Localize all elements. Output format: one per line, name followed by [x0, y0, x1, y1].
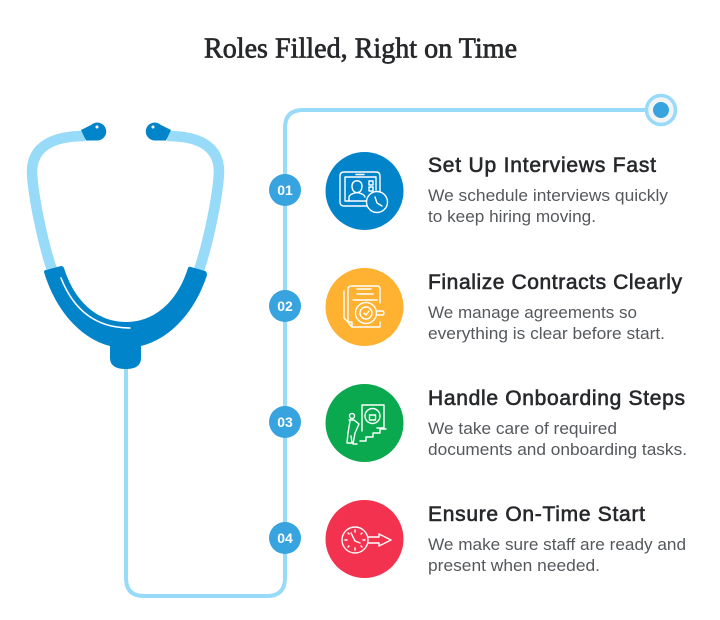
number badge 03: 03 — [277, 414, 293, 430]
right earpiece — [146, 123, 171, 141]
chest yoke — [44, 266, 207, 369]
description — [428, 420, 687, 459]
description: present when needed. — [428, 557, 600, 575]
icon: clock with arrow — [326, 500, 404, 578]
description: everything is clear before start. — [428, 325, 665, 343]
description: We take care of required — [428, 420, 617, 438]
description — [428, 304, 665, 343]
heading: Ensure On-Time Start — [428, 503, 645, 526]
title: Roles Filled, Right on Time — [204, 34, 517, 64]
heading: Handle Onboarding Steps — [428, 387, 685, 410]
number badge 01 — [269, 174, 301, 206]
description: We make sure staff are ready and — [428, 536, 686, 554]
description: documents and onboarding tasks. — [428, 441, 687, 459]
number badge 01: 01 — [277, 182, 293, 198]
description — [428, 536, 686, 575]
step 02 — [269, 268, 682, 346]
stethoscope — [32, 123, 219, 369]
description — [428, 187, 669, 226]
yoke highlight — [61, 278, 130, 328]
description: We manage agreements so — [428, 304, 637, 322]
description: We schedule interviews quickly — [428, 187, 669, 205]
left ear tube — [32, 136, 85, 270]
left earpiece — [81, 123, 106, 141]
heading: Finalize Contracts Clearly — [428, 271, 682, 294]
step 01 — [269, 152, 669, 230]
connector line — [126, 110, 650, 596]
number badge 04: 04 — [277, 530, 293, 546]
icon: person climbing stairs to goal — [326, 384, 404, 462]
number badge 02 — [269, 290, 301, 322]
icon: interview screen with clock — [326, 152, 404, 230]
right ear tube — [167, 136, 219, 270]
number badge 04 — [269, 522, 301, 554]
step 03 — [269, 384, 687, 462]
number badge 02: 02 — [277, 298, 293, 314]
heading: Set Up Interviews Fast — [428, 154, 656, 177]
end terminal dot — [646, 96, 676, 124]
icon: contract with seal — [326, 268, 404, 346]
number badge 03 — [269, 406, 301, 438]
step 04 — [269, 500, 686, 578]
description: to keep hiring moving. — [428, 208, 596, 226]
